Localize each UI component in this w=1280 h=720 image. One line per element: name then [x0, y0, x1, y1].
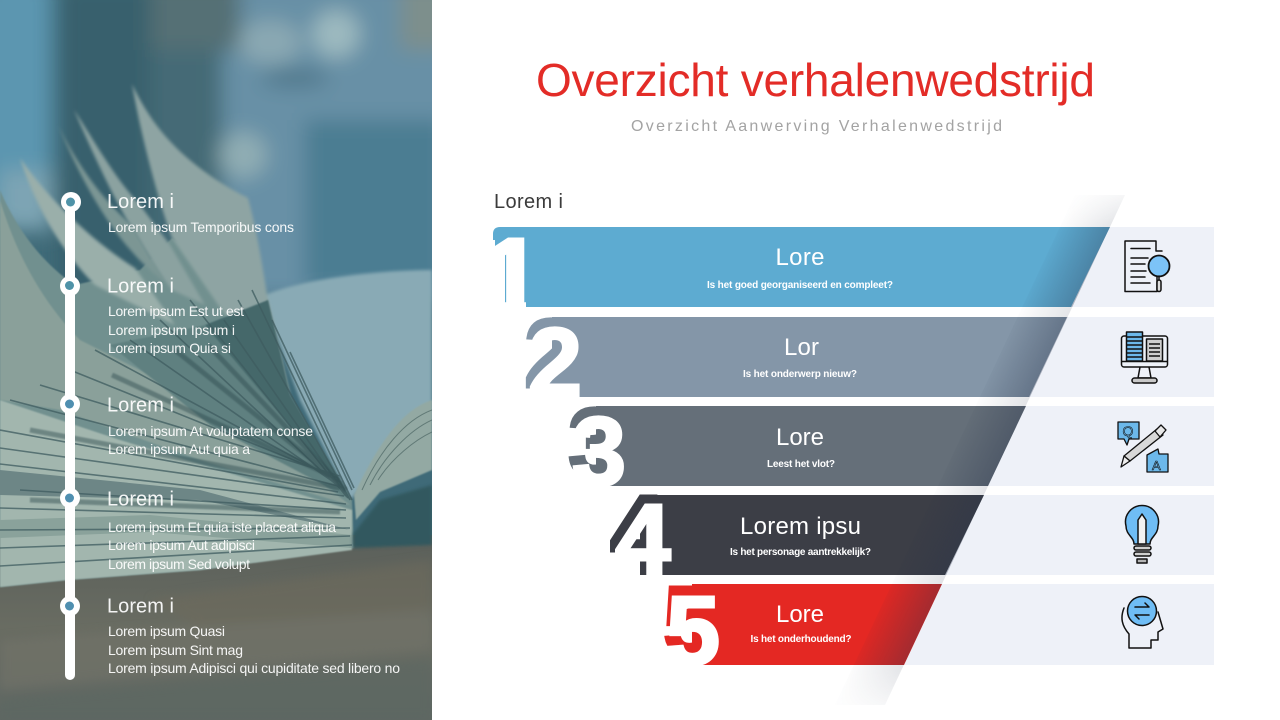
icon: pencil with Q and A	[1118, 422, 1168, 473]
timeline marker 5	[60, 596, 80, 616]
timeline item 3 text	[107, 394, 313, 457]
funnel bar 1: Is het goed georganiseerd en compleet?	[707, 280, 893, 291]
timeline item 2 text	[107, 276, 244, 356]
timeline marker 4	[60, 488, 80, 508]
open right page	[262, 270, 432, 500]
main tall leaf	[132, 84, 290, 395]
subtitle: Overzicht Aanwerving Verhalenwedstrijd	[631, 118, 1002, 135]
page edge lines	[0, 290, 354, 566]
timeline item 4 text	[107, 488, 336, 572]
timeline item 2 text: Lorem ipsum Est ut est	[108, 303, 244, 319]
thin leaves	[74, 110, 205, 305]
photo: open book with teal tint	[0, 0, 452, 720]
funnel bar 2: Is het onderwerp nieuw?	[743, 369, 857, 380]
right page block	[354, 400, 432, 520]
page block	[0, 190, 354, 587]
number 4: 4	[615, 484, 671, 596]
funnel bar 3: Lore	[776, 424, 824, 451]
timeline item 2 text: Lorem ipsum Quia si	[108, 340, 231, 356]
panel: book photo with timeline	[0, 0, 452, 720]
timeline item 3 text: Lorem ipsum Aut quia a	[108, 441, 250, 457]
timeline item 5 text: Lorem ipsum Adipisci qui cupiditate sed libero no	[108, 660, 400, 676]
timeline item 5 text: Lorem ipsum Sint mag	[108, 642, 243, 658]
number 1: 1	[482, 216, 543, 339]
icon: pencil with Q and A: A	[1152, 458, 1161, 473]
title: Overzicht verhalenwedstrijd	[536, 54, 1095, 106]
number 3: 3	[568, 388, 622, 497]
number 5: 5	[666, 576, 720, 685]
slanted shadow edge	[835, 195, 1125, 705]
timeline item 4 text: Lorem i	[107, 488, 174, 510]
number 3: 3	[572, 397, 626, 506]
number 4: 4	[610, 475, 666, 587]
funnel bar 4	[610, 475, 984, 596]
funnel bar 5: Lore	[776, 601, 824, 628]
timeline item 3 text: Lorem ipsum At voluptatem conse	[108, 423, 313, 439]
timeline item 4 text: Lorem ipsum Aut adipisci	[108, 537, 255, 553]
funnel bar 1: Lore	[776, 244, 824, 271]
number 2: 2	[524, 299, 578, 408]
number 2: 2	[528, 308, 582, 417]
wood table	[0, 535, 432, 720]
funnel bar 1	[493, 227, 1110, 307]
timeline item 5 text	[107, 596, 400, 676]
timeline item 4 text: Lorem ipsum Sed volupt	[108, 556, 250, 572]
timeline line	[65, 200, 75, 680]
icon row backgrounds	[840, 227, 1214, 665]
icon: pencil with Q and A: Q	[1122, 423, 1134, 439]
dark fanned pages	[205, 300, 352, 500]
timeline marker 1	[61, 192, 81, 212]
timeline item 3 text: Lorem i	[107, 394, 174, 416]
timeline item 2 text: Lorem i	[107, 276, 174, 298]
funnel bar 4: Lorem ipsu	[740, 513, 861, 540]
timeline item 2 text: Lorem ipsum Ipsum i	[108, 322, 235, 338]
funnel bar 2	[524, 299, 1067, 417]
funnel bar 4: Is het personage aantrekkelijk?	[730, 547, 871, 558]
funnel bar 5: Is het onderhoudend?	[750, 634, 852, 645]
section heading: Lorem i	[494, 191, 563, 213]
timeline item 5 text: Lorem ipsum Quasi	[108, 623, 225, 639]
timeline item 5 text: Lorem i	[107, 596, 174, 618]
icon: document with magnifier	[1125, 241, 1170, 292]
funnel bar 2: Lor	[784, 334, 819, 361]
timeline marker 2	[60, 276, 80, 296]
timeline item 1 text: Lorem ipsum Temporibus cons	[108, 219, 294, 235]
icon: light bulb with pencil	[1126, 505, 1158, 563]
timeline item 1 text	[107, 191, 294, 235]
funnel bar 5	[663, 566, 942, 685]
funnel bar 3: Leest het vlot?	[767, 459, 835, 470]
timeline item 4 text: Lorem ipsum Et quia iste placeat aliqua	[108, 519, 336, 535]
icon: head with exchange arrows	[1122, 596, 1163, 648]
icon: monitor with book	[1122, 332, 1168, 383]
number 1	[495, 238, 526, 307]
number 1: 1	[478, 207, 539, 330]
number 5: 5	[663, 566, 717, 675]
timeline marker 3	[60, 394, 80, 414]
timeline item 1 text: Lorem i	[107, 191, 174, 213]
funnel bar 3	[568, 388, 1026, 506]
